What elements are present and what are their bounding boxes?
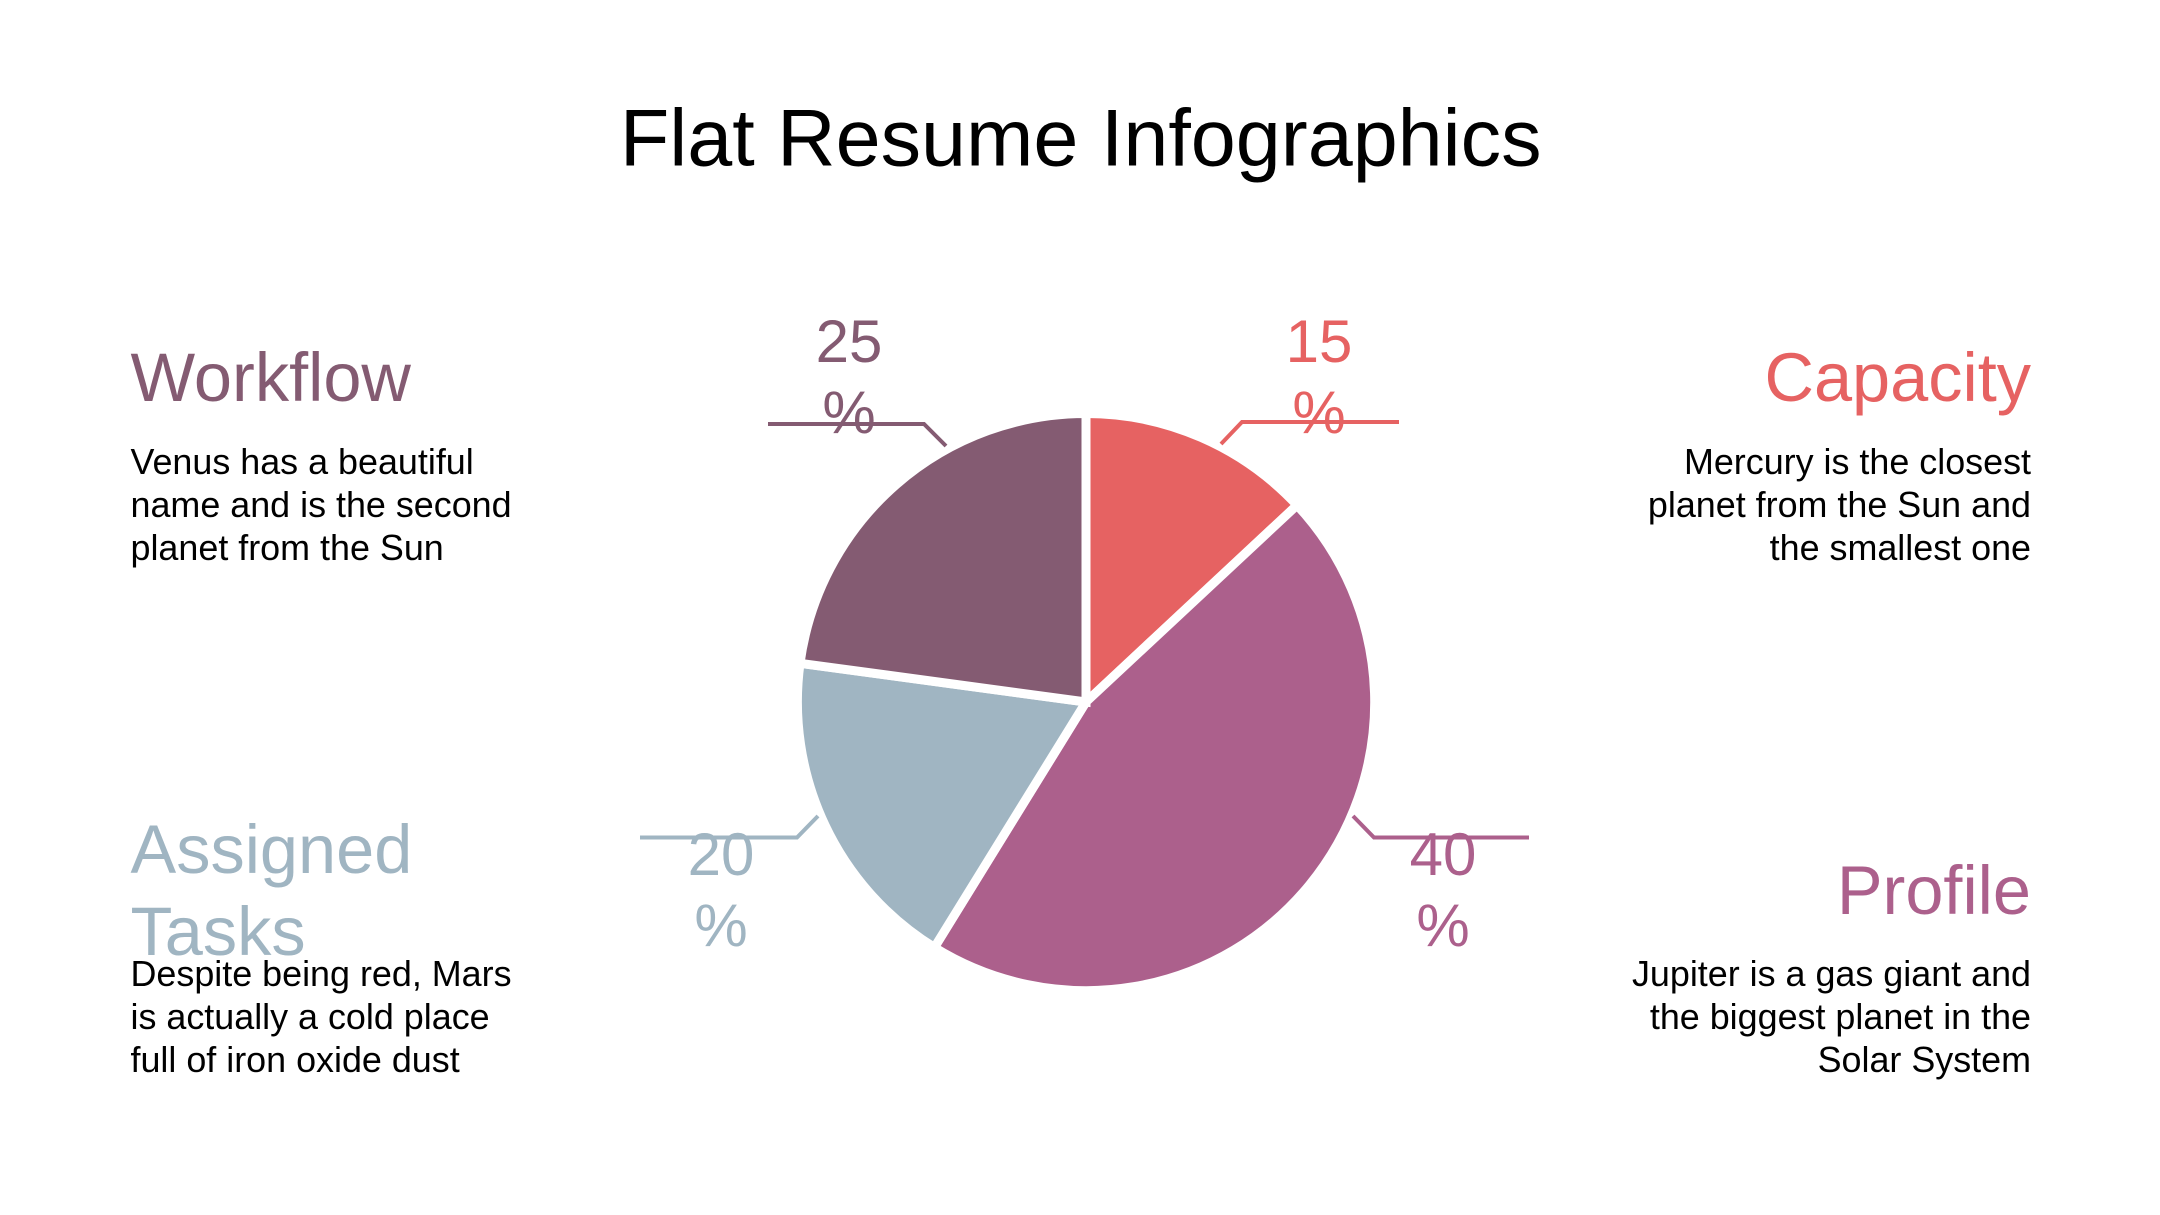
leader line: Workflow	[768, 424, 946, 446]
panel: Assigned Tasks	[130, 811, 512, 1080]
heading: Capacity: Capacity	[1764, 339, 2032, 416]
text: Profile description: Jupiter is a gas giant and	[1632, 954, 2031, 994]
text: Workflow description: name and is the second	[130, 485, 512, 525]
text: Profile description: Solar System	[1818, 1040, 2031, 1080]
text: Workflow description: Venus has a beautiful	[130, 442, 474, 482]
value: 15%: %	[1292, 379, 1346, 446]
text: Workflow description: planet from the Sun	[130, 528, 444, 568]
text: Profile description: the biggest planet in the	[1650, 997, 2031, 1037]
panel: Workflow	[130, 339, 512, 568]
pie slice: Assigned Tasks	[797, 663, 1086, 948]
pie slice: Workflow	[800, 414, 1086, 702]
pie slice: Profile	[934, 505, 1375, 991]
title: Flat Resume Infographics	[620, 94, 1542, 184]
text: Capacity description: planet from the Sun and	[1648, 485, 2031, 525]
value: 25%: 25	[816, 308, 882, 375]
heading: Assigned Tasks: Assigned	[130, 811, 412, 888]
text: Assigned Tasks description: full of iron oxide dust	[130, 1040, 460, 1080]
value: 20%: %	[694, 892, 748, 959]
heading: Profile: Profile	[1837, 852, 2031, 929]
text: Assigned Tasks description: is actually a cold place	[130, 997, 490, 1037]
heading: Assigned Tasks: Tasks	[130, 893, 306, 970]
value: 20%: 20	[688, 821, 754, 888]
text: Capacity description: Mercury is the closest	[1684, 442, 2031, 482]
text: Capacity description: the smallest one	[1770, 528, 2031, 568]
leader line: Capacity	[1221, 422, 1399, 444]
text: Assigned Tasks description: Despite being red, Mars	[130, 954, 512, 994]
panel: Capacity	[1648, 339, 2032, 568]
value: 25%: %	[822, 379, 876, 446]
pie chart	[797, 414, 1375, 991]
panel: Profile	[1632, 852, 2031, 1080]
heading: Workflow: Workflow	[130, 339, 411, 416]
leader line: Assigned Tasks	[640, 816, 818, 838]
value: 40%: %	[1416, 892, 1470, 959]
value: 15%: 15	[1286, 308, 1352, 375]
leader line: Profile	[1353, 816, 1529, 838]
value: 40%: 40	[1410, 821, 1476, 888]
pie slice: Capacity	[1086, 414, 1297, 702]
